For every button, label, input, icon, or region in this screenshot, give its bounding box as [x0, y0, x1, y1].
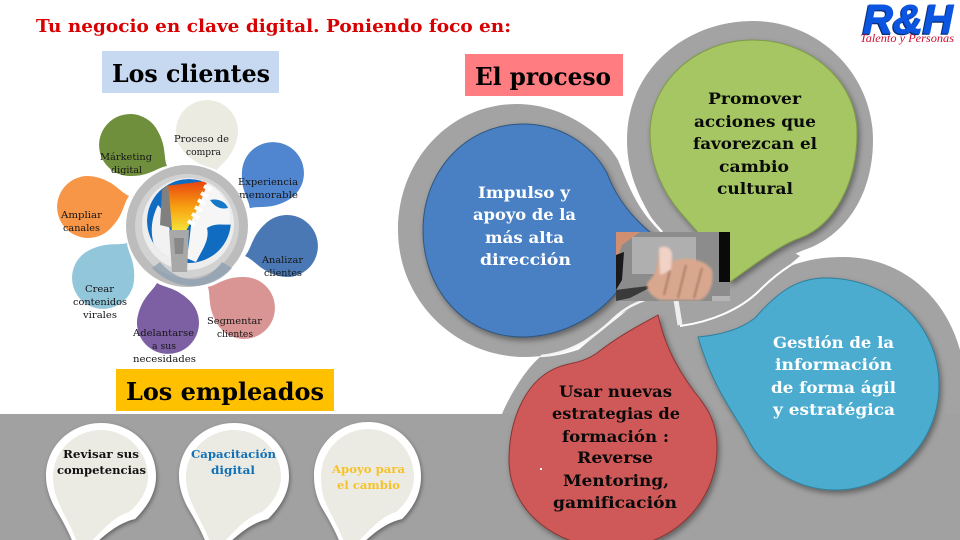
- client petal: Adelantarse a sus necesidades: Adelantarse: [132, 328, 194, 339]
- heading: Los clientes: Los clientes: [112, 59, 270, 88]
- client petal: Adelantarse a sus necesidades: a sus: [152, 341, 176, 352]
- process drop: teal: [698, 278, 939, 490]
- photo: hand touching screen: [616, 232, 730, 301]
- client petal: Crear contenidos virales: virales: [82, 310, 117, 321]
- client petal: Ampliar canales: canales: [63, 223, 100, 234]
- client petal: Proceso de compra: [169, 93, 247, 178]
- process drop: green: cultural: [717, 179, 793, 198]
- process backdrop: grey ring shapes: [398, 21, 960, 420]
- logo: R&H Talento y Personas: Talento y Personas: [860, 31, 954, 45]
- client petal: Ampliar canales: [50, 166, 137, 245]
- process drop: red: [509, 315, 717, 540]
- process drop: blue: dirección: [480, 250, 571, 269]
- client petal: Experiencia memorable: [224, 130, 316, 225]
- client petal: Crear contenidos virales: Crear: [85, 284, 114, 295]
- heading: Los clientes: [102, 51, 279, 93]
- process drop: blue: [423, 124, 660, 337]
- process drop: red: formación :: [562, 427, 669, 446]
- client petal: Segmentar clientes: clientes: [217, 329, 253, 340]
- process drop: green: favorezcan el: [693, 134, 817, 153]
- employee drop: Capacitación digital: digital: [211, 463, 256, 477]
- client petal: Márketing digital: Márketing: [100, 152, 152, 163]
- client petal: Analizar clientes: Analizar: [261, 255, 303, 266]
- client petal: Analizar clientes: clientes: [264, 268, 302, 279]
- process drop: red: Mentoring,: [563, 471, 669, 490]
- process drop: teal: Gestión de la: [773, 333, 894, 352]
- client petal: Segmentar clientes: [192, 260, 286, 350]
- employee drop: Revisar sus competencias: Revisar sus: [63, 447, 139, 461]
- client petal: Márketing digital: digital: [111, 165, 142, 176]
- process drop: red: Reverse: [577, 448, 653, 467]
- bottom grey band: [0, 414, 960, 540]
- process drop: teal: de forma ágil: [771, 378, 896, 397]
- employee drop: Apoyo para el cambio: Apoyo para: [331, 462, 406, 476]
- employee drop: Capacitación digital: Capacitación: [191, 447, 277, 461]
- heading: Los empleados: [116, 369, 334, 411]
- client petal: Crear contenidos virales: contenidos: [73, 297, 127, 308]
- title: Tu negocio en clave digital. Poniendo foco en:: [36, 16, 511, 37]
- client petal: Proceso de compra: compra: [186, 147, 221, 158]
- heading: Los empleados: Los empleados: [126, 377, 324, 406]
- process drop: green: Promover: [708, 89, 802, 108]
- client petal: Crear contenidos virales: [60, 225, 153, 321]
- employee drop: Capacitación digital: [179, 423, 289, 540]
- process drop: green: [650, 40, 857, 282]
- icon: zipped globe with gear ring: [126, 165, 248, 287]
- heading: El proceso: [465, 54, 623, 96]
- process drop: teal: y estratégica: [772, 400, 895, 419]
- employee drop: Revisar sus competencias: [46, 423, 156, 540]
- client petal: Experiencia memorable: Experiencia: [238, 177, 298, 188]
- client petal: Márketing digital: [88, 103, 182, 193]
- process drop: green: acciones que: [694, 112, 816, 131]
- client petal: Experiencia memorable: memorable: [239, 190, 298, 201]
- process drop: blue: apoyo de la: [473, 205, 576, 224]
- client petal: Segmentar clientes: Segmentar: [207, 316, 262, 327]
- process drop: red: Usar nuevas: [559, 382, 672, 401]
- client petal: Adelantarse a sus necesidades: [127, 275, 206, 365]
- client petal: Ampliar canales: Ampliar: [60, 210, 102, 221]
- employee drop: Revisar sus competencias: competencias: [57, 463, 146, 477]
- employee drop: Apoyo para el cambio: [314, 422, 421, 540]
- process drop: teal: información: [775, 355, 892, 374]
- process drop: blue: Impulso y: [478, 183, 571, 202]
- client petal: Adelantarse a sus necesidades: necesidades: [133, 354, 196, 365]
- process drop: red: estrategias de: [552, 404, 680, 423]
- heading: El proceso: El proceso: [475, 62, 611, 91]
- employee drop: Apoyo para el cambio: el cambio: [337, 478, 400, 492]
- process drop: green: cambio: [719, 157, 789, 176]
- client petal: Proceso de compra: Proceso de: [174, 134, 229, 145]
- process drop: red: gamificación: [553, 493, 677, 512]
- client petal: Analizar clientes: [238, 209, 324, 286]
- process drop: blue: más alta: [485, 228, 564, 247]
